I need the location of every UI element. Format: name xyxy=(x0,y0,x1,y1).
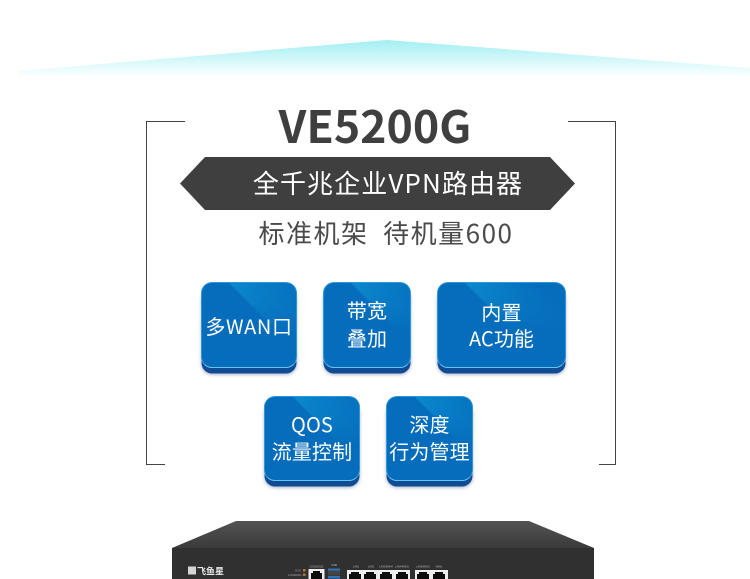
title: VE5200G xyxy=(279,91,471,156)
status LEDs xyxy=(288,568,306,577)
logo: 飞鱼星 xyxy=(197,564,224,578)
feature button: built-in AC xyxy=(437,282,566,368)
LAN ports: LAN3/WAN4 xyxy=(379,566,393,568)
LAN ports: LAN4/WAN3 xyxy=(395,566,409,568)
console port: CONSOLE xyxy=(310,564,323,568)
LAN ports: LAN2 xyxy=(368,566,375,568)
USB port: USB xyxy=(331,563,337,567)
banner: product subtitle xyxy=(180,157,575,210)
feature button: bandwidth aggregation xyxy=(323,282,411,368)
LAN ports: LAN1 xyxy=(353,566,360,568)
banner: product subtitle: 全千兆企业VPN路由器 xyxy=(253,164,523,201)
LAN ports: LAN5/WAN2 xyxy=(416,566,430,568)
status LEDs: LOADING xyxy=(288,573,302,577)
feature button: multi WAN: 多WAN口 xyxy=(205,311,293,340)
feature button: bandwidth aggregation: 带宽 xyxy=(347,295,387,324)
feature button: QoS: 流量控制 xyxy=(272,436,352,465)
decorative cyan peak band xyxy=(18,40,750,74)
feature button: bandwidth aggregation: 叠加 xyxy=(347,323,387,352)
feature button: behavior management: 行为管理 xyxy=(389,436,470,465)
feature button: behavior management: 深度 xyxy=(409,409,450,438)
feature button: multi WAN xyxy=(201,282,297,368)
feature button: behavior management xyxy=(386,396,473,481)
console port xyxy=(308,564,324,579)
feature button: built-in AC: 内置 xyxy=(481,297,522,326)
LAN ports xyxy=(347,566,448,579)
status LEDs: SYS xyxy=(295,568,301,572)
LAN ports: WAN1 xyxy=(436,566,443,568)
USB port xyxy=(328,563,340,578)
feature button: QoS xyxy=(264,396,360,481)
feature button: built-in AC: AC功能 xyxy=(469,323,534,352)
router device xyxy=(172,521,594,579)
feature button: QoS: QOS xyxy=(291,409,333,438)
spec line: 标准机架 待机量600 xyxy=(259,214,513,251)
